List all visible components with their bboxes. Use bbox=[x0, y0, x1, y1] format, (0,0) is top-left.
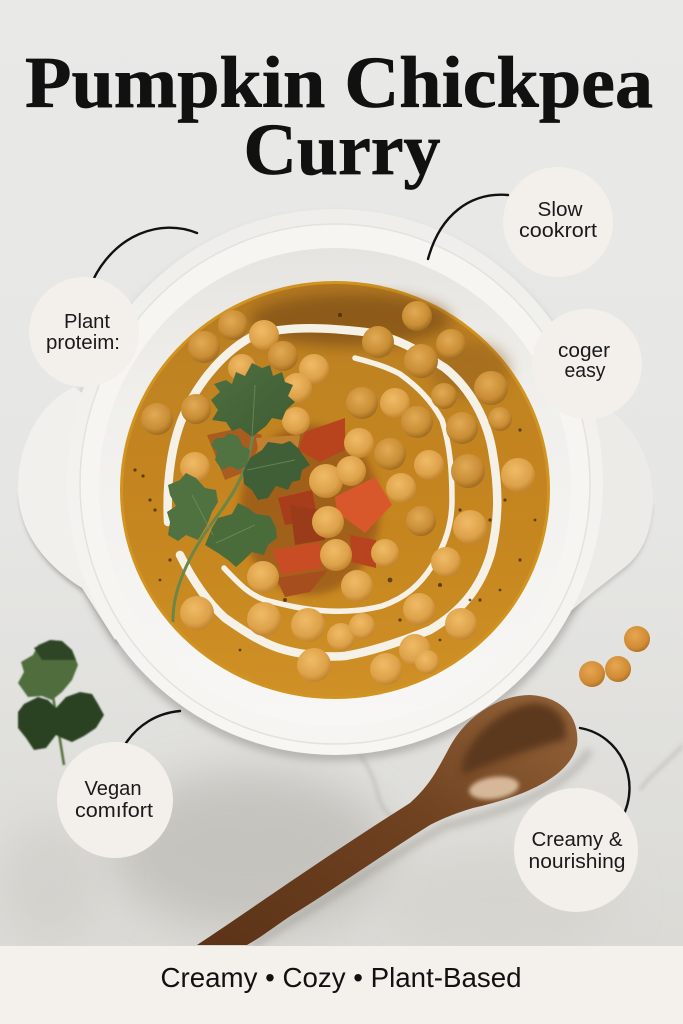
callout: vegan comfort: comıfort bbox=[75, 800, 153, 822]
cilantro on table bbox=[18, 640, 104, 765]
leaf bottom left bbox=[167, 473, 218, 541]
leaf left small bbox=[211, 433, 250, 470]
leaf right bbox=[243, 441, 310, 500]
left handle shadow bbox=[20, 480, 200, 645]
slow cooker bowl bbox=[18, 209, 653, 761]
callout: easy: coger bbox=[558, 340, 610, 362]
title bbox=[25, 42, 653, 190]
stem bbox=[173, 420, 255, 622]
callout: creamy and nourishing bbox=[514, 728, 638, 912]
callout: slow cooker bbox=[428, 167, 613, 277]
callout: easy bbox=[532, 309, 642, 419]
dark broth at top bbox=[250, 294, 450, 346]
cilantro sprig bbox=[167, 363, 310, 622]
callout: creamy and nourishing: nourishing bbox=[528, 851, 626, 873]
callout: vegan comfort bbox=[57, 711, 180, 858]
right handle shadow bbox=[480, 480, 652, 624]
specks bbox=[133, 313, 536, 651]
callout: plant protein bbox=[29, 228, 197, 387]
title: Curry bbox=[244, 109, 440, 190]
tomato and pumpkin chunks bbox=[207, 418, 392, 597]
callout: plant protein: Plant bbox=[64, 311, 110, 333]
right handle bbox=[480, 400, 653, 620]
spoon bowl hollow bbox=[462, 703, 566, 775]
left handle bbox=[18, 387, 200, 640]
loose chickpeas bbox=[579, 626, 650, 687]
wooden spoon bbox=[197, 695, 590, 945]
footer band: Creamy • Cozy • Plant-Based bbox=[160, 962, 522, 993]
callout: creamy and nourishing: Creamy & bbox=[532, 829, 623, 851]
leaf veins bbox=[192, 385, 295, 543]
leaf top bbox=[211, 363, 295, 437]
bowl outer rim bbox=[67, 209, 603, 755]
callout: slow cooker: Slow bbox=[538, 199, 583, 221]
footer band bbox=[0, 946, 683, 1024]
chickpeas bbox=[141, 301, 535, 685]
bowl shadow bbox=[65, 215, 605, 761]
callout: easy: easy bbox=[564, 360, 606, 382]
callout: plant protein: proteim: bbox=[46, 332, 120, 354]
callout: vegan comfort: Vegan bbox=[84, 778, 142, 800]
coconut cream swirl bbox=[168, 328, 497, 657]
leaf bottom right bbox=[205, 503, 277, 567]
curry surface bbox=[120, 281, 550, 699]
title: Pumpkin Chickpea bbox=[25, 42, 653, 123]
spoon highlight bbox=[468, 774, 520, 802]
spoon shadow bbox=[252, 750, 590, 945]
spoon body bbox=[197, 695, 577, 945]
callout: slow cooker: cookrort bbox=[519, 220, 597, 242]
